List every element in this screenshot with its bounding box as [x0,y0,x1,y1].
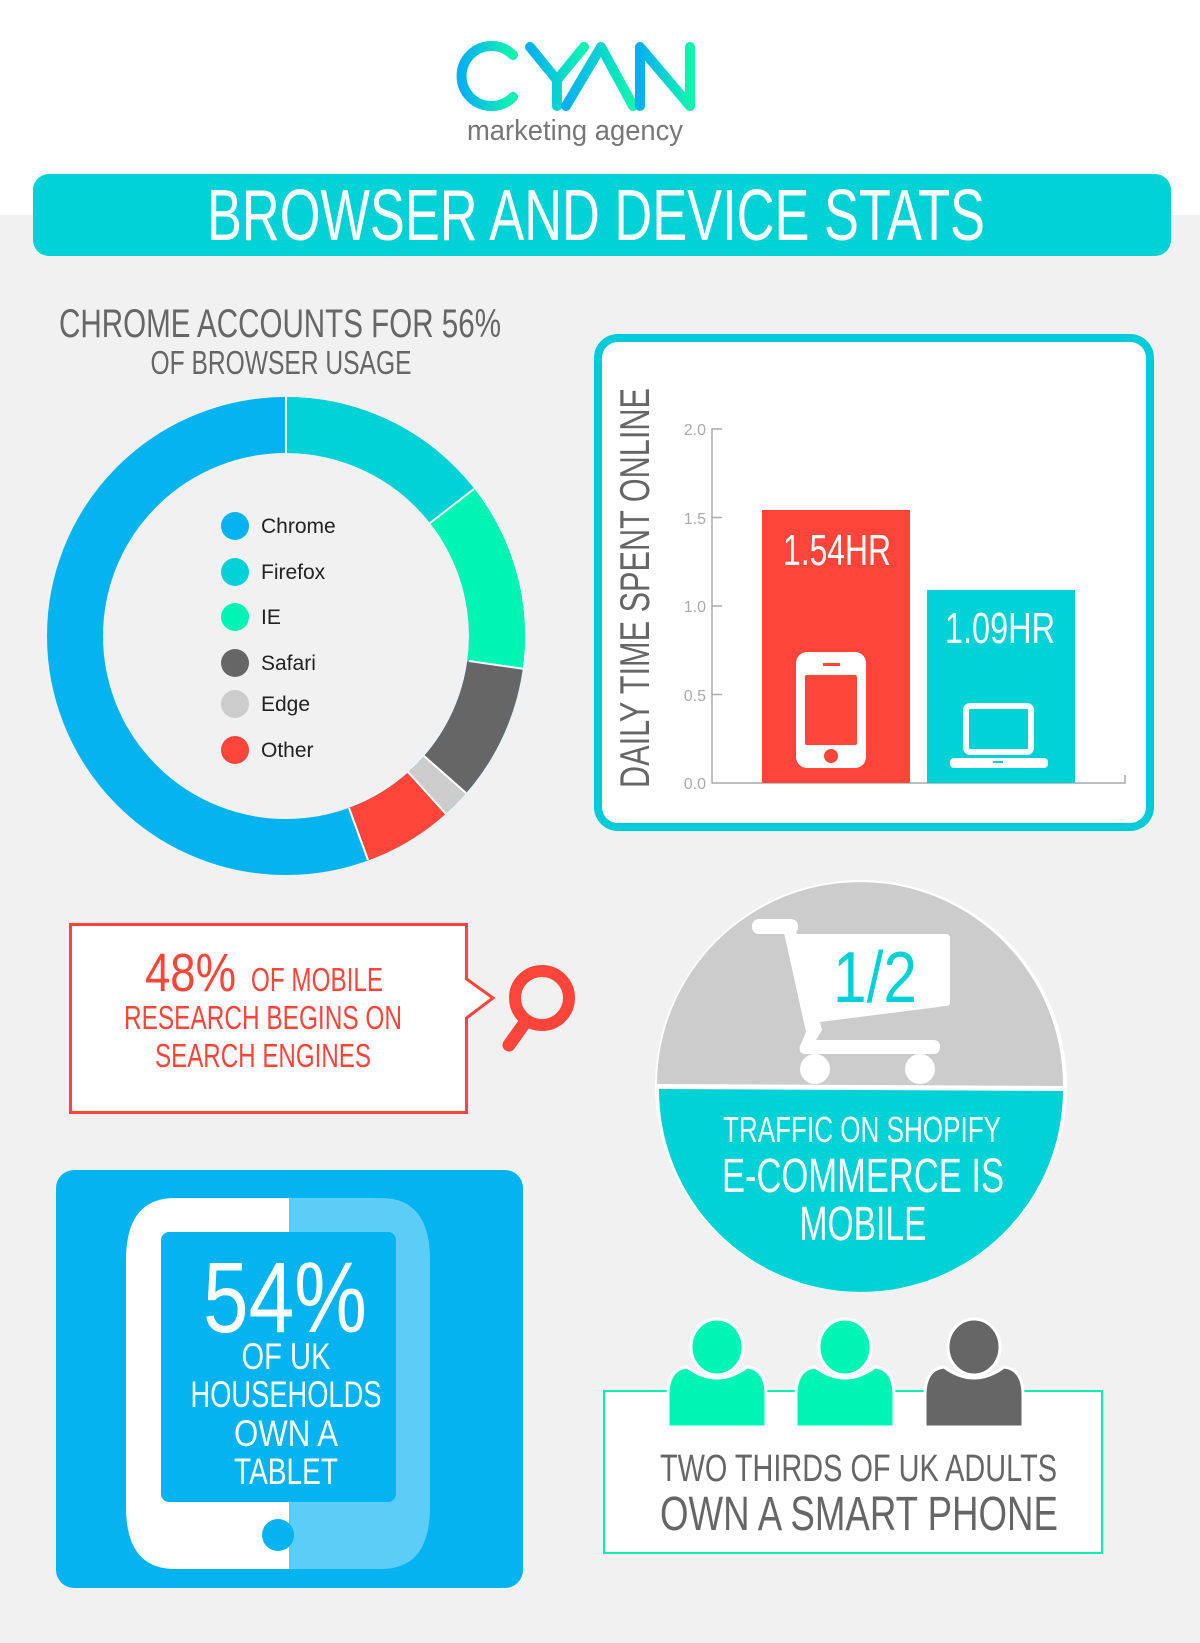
panel: tablet ownership: OF UK [242,1336,331,1377]
legend: Edge [261,693,310,716]
icon: people [668,1319,1023,1427]
heading: chrome share: CHROME ACCOUNTS FOR 56% [59,302,501,346]
panel: daily time spent online bar chart: 0.5 [684,688,706,705]
callout: 48% mobile research: 48% [145,943,236,1003]
circle: shopify mobile traffic: MOBILE [800,1198,926,1251]
panel: tablet ownership: TABLET [234,1451,338,1492]
logo [462,46,690,147]
circle: shopify mobile traffic: 1/2 [833,938,917,1018]
panel: tablet ownership: OWN A [234,1413,338,1454]
callout: 48% mobile research [70,924,493,1112]
panel: daily time spent online bar chart [598,338,1150,827]
callout: 48% mobile research: OF MOBILE [251,961,383,998]
heading: chrome share: OF BROWSER USAGE [150,344,412,381]
circle: shopify mobile traffic [655,880,1067,1292]
legend [221,512,336,764]
bar: mobile [762,510,910,783]
panel: tablet ownership [56,1170,523,1588]
heading: chrome share [59,302,501,381]
bar: mobile: 1.54HR [783,526,891,575]
panel: smartphone ownership: TWO THIRDS OF UK ADULTS [660,1448,1057,1490]
legend: Other [261,739,314,762]
circle: shopify mobile traffic: E-COMMERCE IS [722,1150,1004,1203]
panel: tablet ownership: 54% [203,1242,367,1354]
callout: 48% mobile research: RESEARCH BEGINS ON [124,999,402,1036]
panel: daily time spent online bar chart: 1.0 [684,599,706,616]
legend: IE [261,606,281,629]
bar: desktop: 1.09HR [945,604,1055,653]
panel: smartphone ownership [604,1319,1102,1553]
icon: magnifier [509,971,569,1045]
bar: desktop [927,590,1075,783]
axis title: DAILY TIME SPENT ONLINE [611,388,658,788]
legend: Safari [261,652,316,675]
panel: daily time spent online bar chart: 2.0 [684,422,706,439]
panel: smartphone ownership: OWN A SMART PHONE [660,1488,1058,1541]
legend: Firefox [261,561,326,584]
panel: daily time spent online bar chart: 0.0 [684,776,706,793]
circle: shopify mobile traffic: TRAFFIC ON SHOPIFY [723,1109,1001,1150]
panel: tablet ownership: HOUSEHOLDS [190,1374,382,1415]
panel: daily time spent online bar chart: 1.5 [684,511,706,528]
legend: Chrome [261,515,336,538]
icon: tablet [126,1198,430,1569]
callout: 48% mobile research: SEARCH ENGINES [155,1037,371,1074]
logo subtitle: marketing agency [467,115,683,147]
icon: shopping cart [752,919,950,1084]
donut chart: browser usage [75,397,525,860]
